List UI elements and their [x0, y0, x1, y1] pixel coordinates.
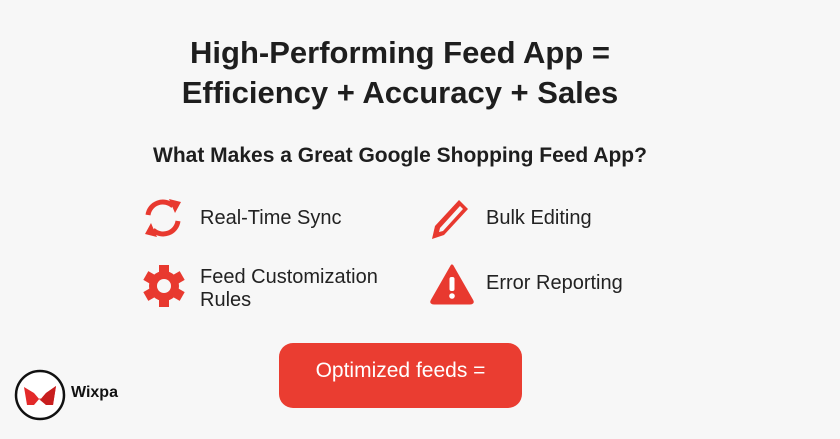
title: Efficiency + Accuracy + Sales	[182, 75, 618, 110]
item: feed customization rules: Rules	[200, 289, 251, 311]
button: Optimized feeds =	[316, 359, 485, 382]
icon: warning	[430, 264, 474, 304]
logo	[14, 370, 118, 420]
icon: pencil	[432, 200, 468, 239]
logo: Wixpa	[71, 384, 118, 401]
item: error reporting: Error Reporting	[486, 272, 623, 294]
subtitle: What Makes a Great Google Shopping Feed App?	[153, 144, 647, 167]
item: real-time sync: Real-Time Sync	[200, 207, 342, 229]
button	[279, 343, 522, 408]
item: feed customization rules: Feed Customization	[200, 266, 378, 288]
title: High-Performing Feed App =	[190, 35, 610, 70]
item: bulk editing: Bulk Editing	[486, 207, 592, 229]
icon: sync	[145, 199, 181, 237]
item: feed customization rules	[200, 266, 378, 311]
title	[182, 35, 618, 110]
icon: gear	[143, 265, 185, 307]
